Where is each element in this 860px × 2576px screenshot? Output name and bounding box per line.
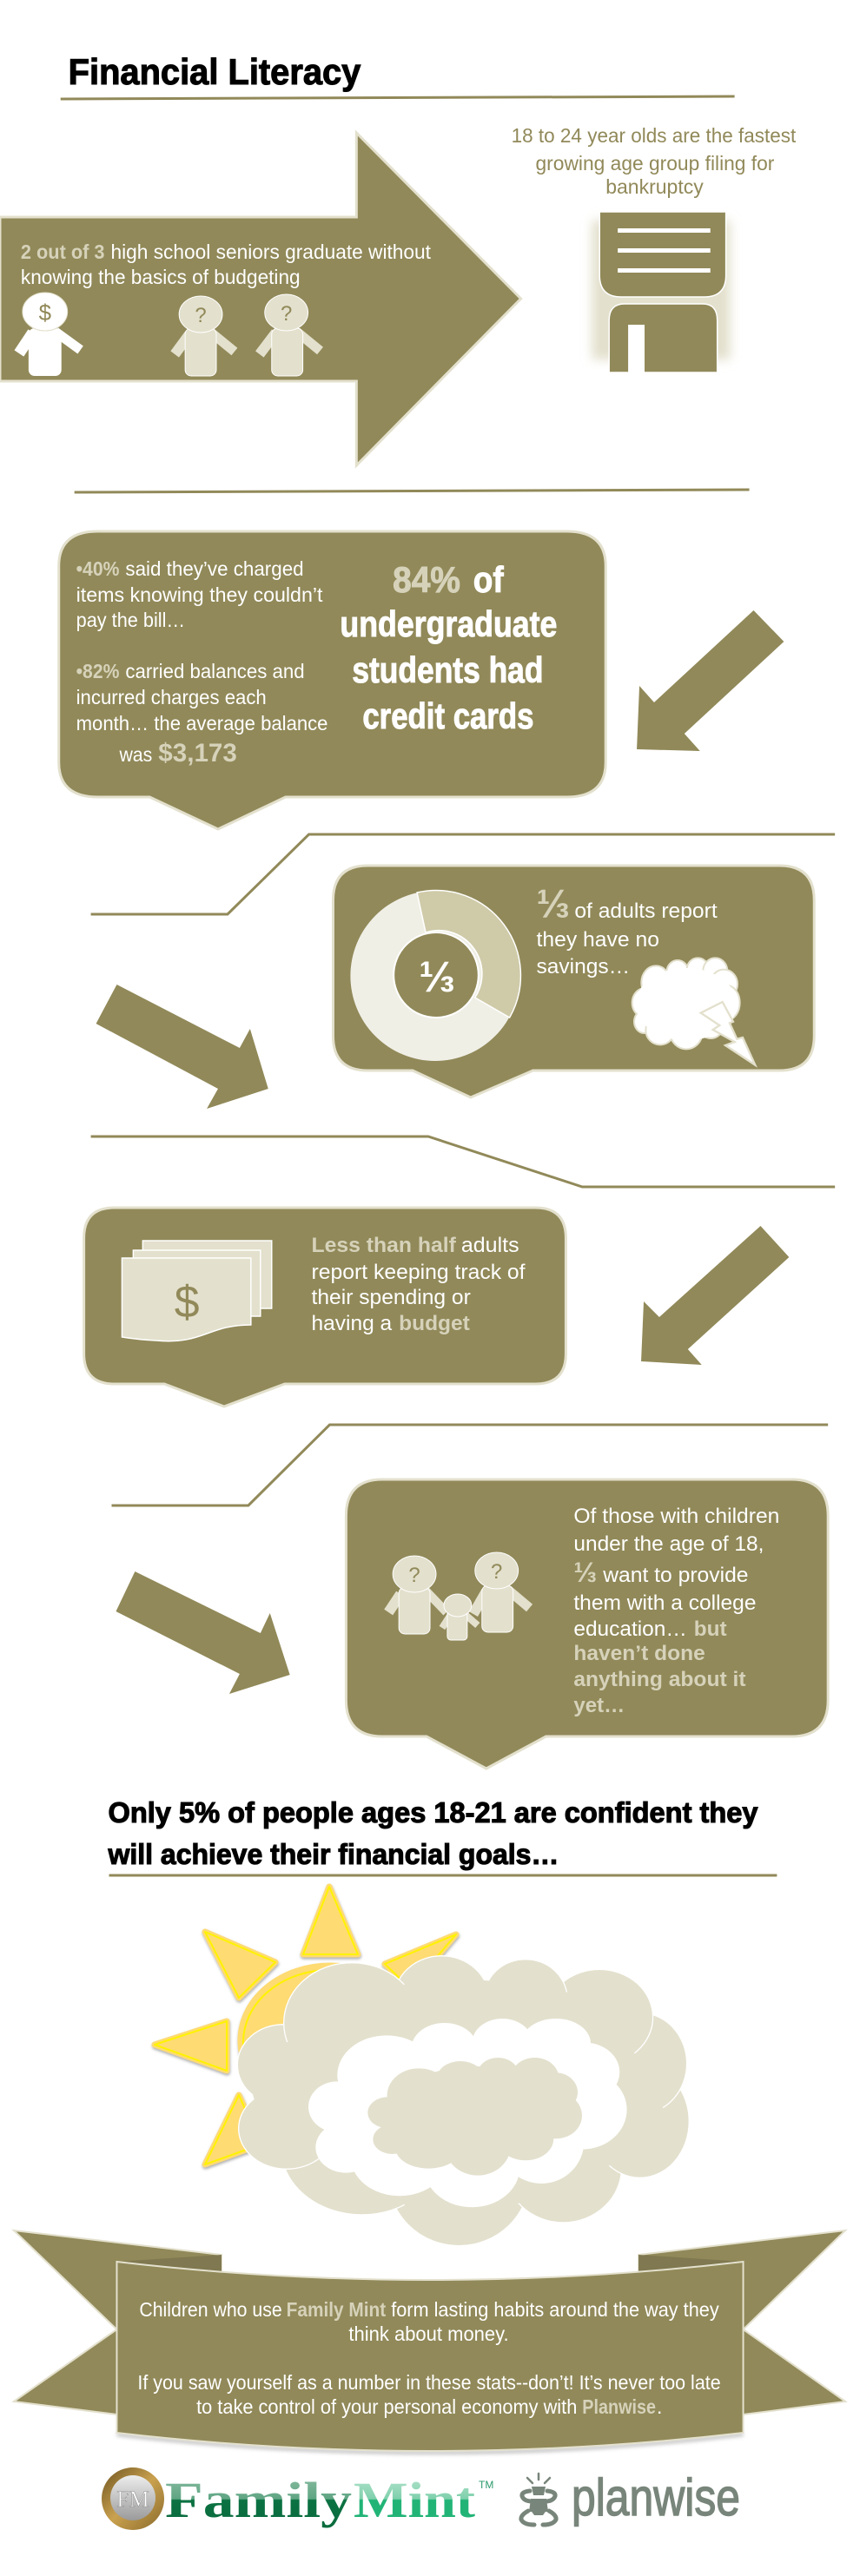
panel: college education — [346, 1479, 828, 1769]
text: bullet statistics: •40% — [76, 557, 119, 580]
icon: sun — [155, 1887, 456, 2164]
panel: big arrow, high school seniors — [0, 133, 521, 465]
text: bullet statistics: pay the bill… — [76, 609, 185, 631]
text: ribbon message: Children who use — [139, 2298, 282, 2321]
arrow: pointing down-left — [637, 610, 784, 751]
text: bankruptcy statistic: growing age group filing for — [536, 152, 775, 175]
text: 2 out of 3: high school seniors graduate without — [110, 240, 432, 263]
icon: family with question marks: ? — [491, 1560, 502, 1584]
text: one third of adults: of adults report — [574, 899, 718, 923]
icon: middle white cloud — [308, 2019, 627, 2207]
text: one third of adults — [537, 881, 718, 978]
panel: ribbon banner — [14, 2230, 845, 2453]
text: those with children: anything about it — [573, 1668, 746, 1691]
text: bullet statistics: •82% — [76, 660, 119, 682]
icon: person with dollar: $ — [39, 301, 51, 326]
donut chart: ⅓ — [419, 952, 455, 1001]
text: ribbon message: think about money. — [348, 2322, 509, 2345]
text: less than half adults: their spending or — [312, 1286, 471, 1309]
panel: one third no savings — [333, 866, 814, 1097]
title: Financial Literacy — [69, 51, 361, 92]
text: bullet statistics: incurred charges each — [76, 686, 267, 708]
icon: coin: FM — [116, 2487, 149, 2512]
icon: inner cloud — [367, 2058, 582, 2176]
icon: dollar bills — [122, 1241, 272, 1341]
speech bubble — [59, 531, 605, 829]
text: those with children: Of those with children — [573, 1505, 779, 1528]
text: ribbon message: Family Mint — [287, 2298, 387, 2321]
text: less than half adults: adults — [461, 1234, 519, 1257]
panel: credit card statistics — [59, 531, 605, 829]
icon: person with question mark — [175, 296, 235, 376]
icon: family with question marks: ? — [408, 1564, 420, 1587]
text: bullet statistics: was — [119, 743, 152, 766]
text: ribbon message: to take control of your personal economy with — [196, 2395, 577, 2418]
ribbon tails — [14, 2230, 845, 2415]
illustration: sun behind cloud — [155, 1887, 689, 2246]
heading: only 5 percent: Only 5% of people ages 18-21 are confident they — [108, 1796, 758, 1828]
text: 84% of undergraduate students had credit cards: 84% — [393, 559, 460, 600]
text: those with children: want to provide — [602, 1564, 749, 1587]
text: bankruptcy statistic: bankruptcy — [605, 175, 704, 198]
icon: person with dollar — [19, 293, 81, 376]
logo: planwise: planwise — [572, 2468, 740, 2527]
text: those with children: but — [694, 1617, 727, 1641]
speech bubble — [84, 1208, 566, 1407]
text: bullet statistics: $3,173 — [158, 739, 237, 768]
arrow: pointing down-right — [96, 985, 268, 1109]
arrow: pointing down-left — [641, 1226, 789, 1365]
text: bullet statistics: carried balances and — [125, 660, 305, 682]
text: 2 out of 3: 2 out of 3 — [21, 240, 105, 263]
logo: FamilyMint: TM — [479, 2479, 493, 2491]
text: less than half adults: budget — [399, 1312, 470, 1335]
text: 84% of undergraduate students had credit cards: undergraduate — [340, 603, 557, 644]
text: those with children: education… — [573, 1617, 687, 1641]
icon: person with question mark: ? — [281, 302, 292, 326]
text: less than half adults: Less than half — [312, 1234, 457, 1257]
heading: only 5 percent — [108, 1796, 777, 1875]
text: one third of adults: ⅓ — [537, 881, 570, 926]
ribbon centre — [116, 2262, 744, 2451]
arrow shape — [0, 133, 521, 465]
text: bullet statistics — [76, 557, 327, 768]
text: bankruptcy statistic: 18 to 24 year olds are the fastest — [512, 124, 797, 147]
text: those with children: under the age of 18, — [573, 1532, 764, 1556]
text: those with children: them with a college — [573, 1591, 757, 1615]
text: those with children — [573, 1505, 779, 1717]
logo: FamilyMint: Mint — [354, 2472, 476, 2528]
text: 84% of undergraduate students had credit cards: of — [473, 559, 505, 600]
heading: only 5 percent: will achieve their financial goals… — [108, 1838, 559, 1870]
text: those with children: haven’t done — [573, 1642, 705, 1665]
icon: planwise figure — [521, 2474, 556, 2525]
text: ribbon message — [137, 2298, 721, 2418]
arrow: pointing down-right — [116, 1571, 290, 1694]
logo: FamilyMint — [102, 2467, 493, 2530]
logo: FamilyMint: Family — [165, 2472, 352, 2528]
icon: storm cloud — [632, 958, 755, 1065]
text: 2 out of 3 — [21, 240, 432, 288]
text: bullet statistics: month… the average balance — [76, 712, 327, 735]
text: those with children: yet… — [573, 1694, 625, 1717]
text: less than half adults — [312, 1234, 526, 1335]
speech bubble — [333, 866, 814, 1097]
text: 84% of undergraduate students had credit cards: students had — [352, 649, 543, 690]
text: one third of adults: they have no — [537, 928, 659, 952]
text: ribbon message: form lasting habits around the way they — [391, 2298, 719, 2321]
logo: planwise — [521, 2468, 740, 2527]
text: ribbon message: If you saw yourself as a number in these stats--don’t! It’s never too late — [137, 2371, 721, 2394]
icon: coin — [102, 2467, 164, 2530]
panel: tracking spending — [84, 1208, 566, 1407]
text: 84% of undergraduate students had credit cards — [340, 559, 557, 736]
icon: outer cloud — [237, 1956, 689, 2246]
icon: floppy disk — [592, 212, 731, 372]
icon: dollar bills: $ — [175, 1276, 200, 1327]
text: bankruptcy statistic — [512, 124, 797, 198]
donut chart — [350, 891, 520, 1061]
text: 2 out of 3: knowing the basics of budgeting — [21, 266, 301, 288]
icon: person with question mark: ? — [195, 304, 207, 327]
text: less than half adults: report keeping track of — [312, 1261, 526, 1284]
text: 84% of undergraduate students had credit cards: credit cards — [362, 695, 534, 736]
speech bubble — [346, 1479, 828, 1769]
text: less than half adults: having a — [312, 1312, 393, 1335]
icon: person with question mark — [260, 294, 321, 376]
icon: family with question marks — [388, 1552, 530, 1640]
text: ribbon message: Planwise — [582, 2395, 656, 2418]
text: ribbon message: . — [657, 2395, 662, 2418]
text: one third of adults: savings… — [537, 955, 630, 978]
text: those with children: ⅓ — [573, 1557, 597, 1588]
text: bullet statistics: said they’ve charged — [125, 557, 304, 580]
text: bullet statistics: items knowing they couldn’t — [76, 583, 323, 606]
title — [61, 51, 735, 99]
